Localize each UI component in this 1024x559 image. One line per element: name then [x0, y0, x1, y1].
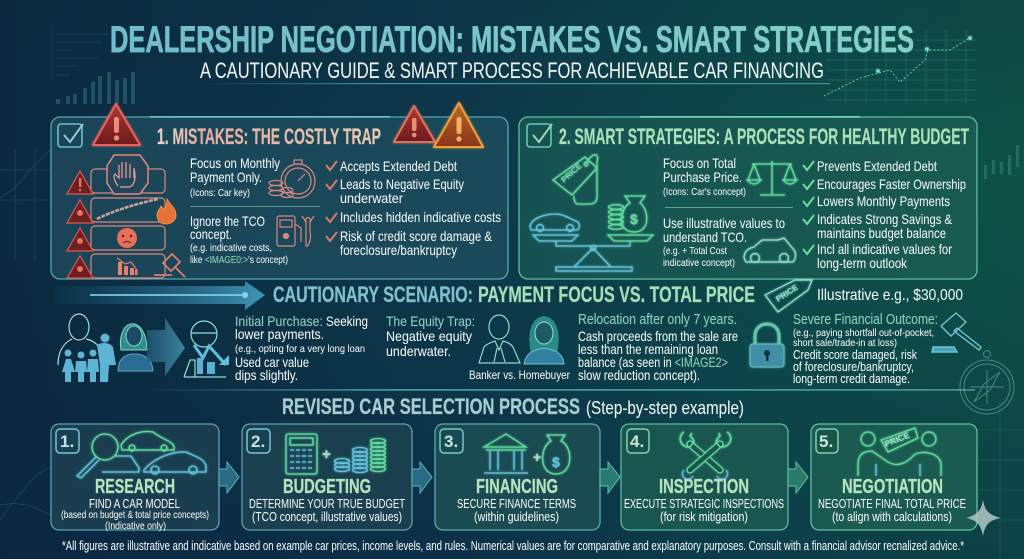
icon: crossed wrenches — [680, 432, 731, 479]
step text: DETERMINE YOUR TRUE BUDGET — [249, 496, 405, 511]
icon: compass — [960, 350, 1014, 414]
step text: RESEARCH — [95, 476, 175, 498]
icon: price tag — [765, 280, 812, 312]
checklist: mistakes: Includes hidden indicative costs — [340, 209, 501, 225]
badge — [56, 429, 79, 453]
icon: car with open hood — [744, 238, 796, 262]
icon: gavel — [932, 313, 981, 352]
caption: banker vs homebuyer: Banker vs. Homebuyer — [469, 368, 570, 382]
badge — [816, 429, 838, 453]
step text: NEGOTIATE FINAL TOTAL PRICE — [818, 496, 966, 511]
step text: (within guidelines) — [474, 509, 559, 524]
step text: (to align with calculations) — [832, 509, 952, 524]
checklist: strategies: Incl all indicative values for — [817, 241, 952, 257]
badge: 5. — [819, 432, 833, 451]
text: relocation: Relocation after only 7 years. — [578, 311, 737, 328]
text: focus on monthly payment: Payment Only. — [190, 169, 262, 185]
step text: (Indicative only) — [105, 520, 166, 532]
text: ignore the TCO: concept. — [190, 226, 232, 242]
text: initial purchase: (e.g., opting for a very long loan — [235, 343, 365, 355]
text: equity trap: Negative equity — [386, 328, 472, 344]
text: initial purchase — [235, 313, 368, 383]
icon: handshake with price tag — [858, 428, 941, 476]
icon: balance with car and money: $ — [630, 211, 638, 227]
step text — [624, 476, 784, 524]
text: severe outcome: short sale/trade-in at loss) — [793, 337, 897, 349]
arrow: step 4 to 5 — [788, 462, 808, 493]
arrow: scenario lead-in — [55, 281, 265, 310]
checklist: strategies: maintains budget balance — [817, 225, 946, 241]
step 4: inspection — [621, 424, 788, 530]
arrow: step 3 to 4 — [600, 462, 620, 493]
step 1: research — [51, 424, 219, 532]
text: ignore the TCO — [190, 213, 288, 266]
text: ignore the TCO: Ignore the TCO — [190, 213, 265, 229]
text: focus on total price — [663, 155, 746, 198]
step 3: financing — [435, 424, 600, 530]
checklist: mistakes — [326, 158, 501, 258]
text: equity trap: The Equity Trap: — [386, 313, 475, 329]
text: initial purchase: lower payments. — [235, 326, 324, 342]
text: ignore the TCO: like <IMAGE0:>'s concept) — [190, 254, 288, 266]
icon: checkbox — [58, 124, 83, 147]
step text — [457, 476, 576, 524]
icon: scales — [747, 161, 797, 195]
text: equity trap: underwater. — [386, 343, 451, 359]
scenario heading: CAUTIONARY SCENARIO: — [273, 282, 473, 307]
checklist: strategies: Prevents Extended Debt — [817, 158, 937, 174]
text: focus on monthly payment: (Icons: Car key) — [190, 187, 250, 199]
badge — [440, 429, 463, 453]
icon: calculator and coins — [286, 434, 386, 474]
icon: price tag: PRICE — [774, 282, 800, 304]
checklist: mistakes: foreclosure/bankruptcy — [340, 242, 457, 258]
badge — [247, 429, 270, 453]
text: use illustrative values — [663, 215, 785, 269]
text: use illustrative values: Use illustrative values to — [663, 215, 785, 231]
step text: FIND A CAR MODEL — [89, 496, 180, 511]
badge: 1. — [60, 432, 74, 451]
step 5: negotiation — [811, 424, 977, 530]
icon: trap ladder of warnings — [67, 155, 185, 278]
icon: bank and money bag — [484, 434, 570, 474]
text: focus on monthly payment: Focus on Monthly — [190, 155, 280, 171]
arrow: step 2 to 3 — [412, 462, 432, 493]
text: use illustrative values: (e.g. + Total Cost — [663, 245, 727, 257]
checklist: mistakes: Risk of credit score damage & — [340, 228, 493, 244]
subtitle: A CAUTIONARY GUIDE & SMART PROCESS FOR ACHIEVABLE CAR FINANCING — [200, 58, 824, 83]
icon: cars and magnifier — [77, 432, 206, 478]
checklist: strategies — [803, 158, 966, 271]
step text: EXECUTE STRATEGIC INSPECTIONS — [624, 496, 784, 511]
text: use illustrative values: understand TCO. — [663, 229, 747, 245]
icon: price tag: PRICE — [559, 161, 584, 184]
step text: NEGOTIATION — [842, 476, 943, 498]
text: relocation: slow reduction concept). — [578, 367, 700, 383]
step text: SECURE FINANCE TERMS — [457, 496, 576, 511]
scenario heading — [273, 282, 755, 307]
icon: large warning triangle — [93, 104, 140, 145]
icon: calculator and coins: + — [322, 446, 331, 463]
icon: coins and stopwatch — [269, 160, 315, 198]
icon: padlock — [750, 324, 784, 367]
panel: smart strategies — [519, 116, 977, 279]
text: relocation — [578, 311, 738, 383]
badge: 3. — [444, 432, 458, 451]
text: initial purchase: Used car value — [235, 354, 309, 370]
checklist: strategies: Encourages Faster Ownership — [817, 176, 966, 192]
text: severe outcome: of foreclosure/bankruptcy, — [793, 359, 914, 374]
text: relocation: Cash proceeds from the sale are — [578, 328, 738, 344]
arrow: step 1 to 2 — [219, 462, 239, 493]
icon: banker and homebuyer — [479, 315, 564, 364]
icon: bank and money bag: $ — [552, 454, 560, 470]
text: severe outcome: (e.g., paying shortfall out-of-pocket, — [793, 327, 934, 339]
icon: warning triangles pair — [394, 103, 483, 147]
text: ignore the TCO: (e.g. indicative costs, — [190, 242, 272, 254]
checklist: strategies: Indicates Strong Savings & — [817, 211, 953, 227]
icon: balance with car and money — [530, 196, 653, 271]
checklist: strategies: Lowers Monthly Payments — [817, 193, 950, 209]
step text — [818, 476, 966, 524]
checklist: strategies: long-term outlook — [817, 255, 908, 271]
text: focus on total price: Purchase Price. — [663, 169, 742, 185]
illustrative price: Illustrative e.g., $30,000 — [817, 287, 963, 304]
icon: handshake with price tag: PRICE — [883, 430, 911, 449]
section heading: process: (Step-by-step example) — [586, 398, 744, 418]
text: initial purchase: Initial Purchase: — [235, 313, 323, 329]
step 2: budgeting — [242, 424, 412, 530]
section heading: process: REVISED CAR SELECTION PROCESS — [282, 394, 580, 419]
step text: (based on budget & total price concepts) — [61, 509, 209, 521]
text: initial purchase: dips slightly. — [235, 367, 298, 383]
step text — [61, 476, 209, 532]
text: initial purchase: Seeking — [326, 313, 368, 329]
panel heading: 1. MISTAKES: THE COSTLY TRAP — [157, 124, 381, 149]
text: severe outcome: long-term credit damage. — [793, 371, 910, 386]
text: use illustrative values: indicative concept) — [663, 257, 735, 269]
text: focus on monthly payment — [190, 155, 280, 199]
scenario heading: PAYMENT FOCUS VS. TOTAL PRICE — [478, 282, 755, 307]
badge — [627, 429, 649, 453]
text: severe outcome: Credit score damaged, risk — [793, 347, 917, 362]
text: severe outcome: Severe Financial Outcome: — [793, 311, 938, 328]
checklist: mistakes: Accepts Extended Debt — [340, 158, 457, 174]
checklist: mistakes: underwater — [340, 190, 403, 206]
panel: mistakes — [51, 103, 508, 279]
icon: family and worried buyer — [58, 314, 153, 382]
icon: price tag — [553, 155, 598, 204]
text: equity trap — [386, 313, 475, 359]
icon: sparkle — [966, 500, 1001, 536]
step text — [249, 476, 405, 524]
text: relocation: balance (as seen in <IMAGE2> — [578, 354, 728, 370]
badge: 4. — [630, 432, 644, 451]
icon: bank and money bag: + — [533, 449, 541, 465]
icon: fuel pump and wrench — [277, 216, 314, 246]
step text: BUDGETING — [283, 476, 371, 498]
step text: (for risk mitigation) — [660, 509, 748, 524]
text: severe outcome — [793, 311, 938, 386]
step text: FINANCING — [476, 476, 558, 498]
step text: (TCO concept, illustrative values) — [252, 509, 402, 524]
step text: INSPECTION — [659, 476, 749, 498]
icon: checkbox — [527, 124, 552, 147]
text: focus on total price: Focus on Total — [663, 155, 736, 171]
badge: 2. — [251, 432, 265, 451]
text: relocation: less than the remaining loan — [578, 341, 718, 357]
checklist: mistakes: Leads to Negative Equity — [340, 176, 464, 192]
arrow: scenario transition — [147, 318, 185, 376]
icon: buyer and falling value — [184, 321, 229, 377]
text: focus on total price: (Icons: Car's concept) — [663, 186, 746, 198]
